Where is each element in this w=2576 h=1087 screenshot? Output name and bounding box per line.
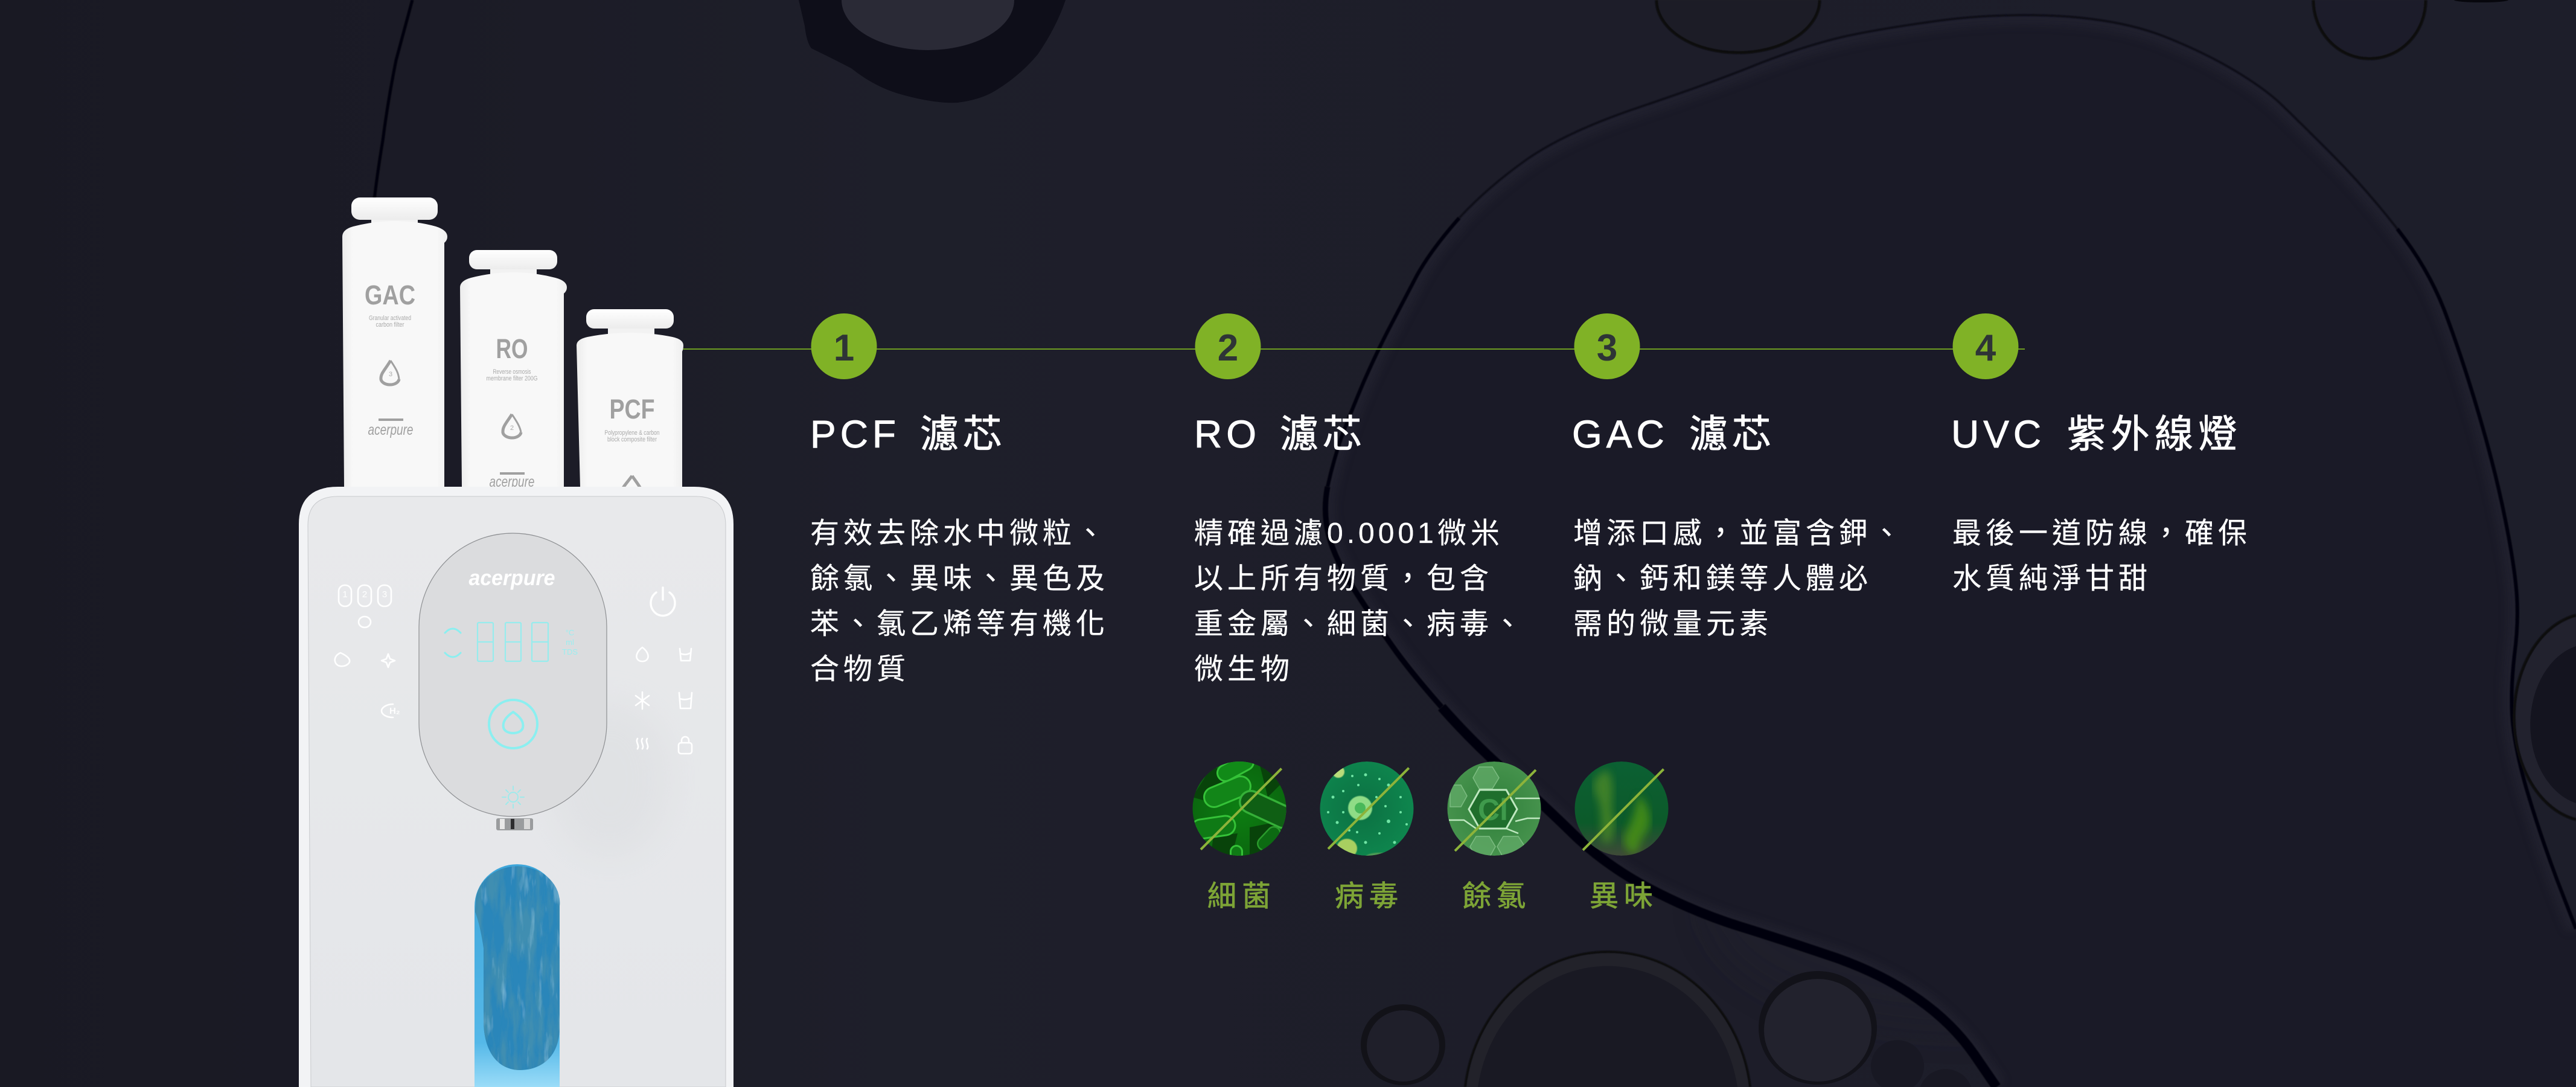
water tank window [475,864,560,1087]
label: virus: 病毒 [1335,880,1404,912]
panel: water purifier body [299,487,733,1087]
heading: 濾芯 [1689,412,1775,456]
filter: RO [460,250,567,490]
label: residual chlorine: 餘氯 [1462,880,1531,912]
icon: power button [651,588,675,616]
heading: GAC [1572,412,1669,456]
filter: GAC: acerpure [368,422,413,438]
description: 增添口感，並富含鉀、 [1573,518,1905,550]
icon: UV indicator [502,786,524,808]
connector line across steps [682,348,2025,350]
icon: bacteria crossed out [1192,761,1286,864]
heading: 紫外線燈 [2067,412,2242,456]
icon: odour crossed out [1574,762,1669,856]
description: 合物質 [810,653,910,685]
step badge: 3 [1597,327,1617,369]
icon: left panel function icons: H₂ [389,706,400,716]
readout units: °C [566,628,574,637]
label: bacteria: 細菌 [1207,880,1276,912]
readout units: TDS [562,647,578,656]
filter: RO: acerpure [489,473,535,490]
step 2: RO filter [1194,313,1526,685]
filter: GAC: GAC [365,280,415,310]
icon: left panel function icons [335,653,400,717]
filter: GAC: 3 [389,371,392,378]
panel: display oval [419,533,607,816]
filter: PCF [577,309,683,490]
description: 最後一道防線，確保 [1952,518,2251,550]
background: top-left dark bubble [799,0,1066,103]
filter: RO: membrane filter 200G [487,375,537,382]
filter: GAC [342,197,447,487]
filter: RO: RO [496,333,528,364]
readout units [562,628,578,656]
icon: residual chlorine crossed out: Cl [1478,793,1508,827]
description: 需的微量元素 [1573,608,1772,640]
step 4: UVC lamp [1951,313,2251,595]
filter: GAC: Granular activated [369,315,411,322]
step badge: 2 [1218,327,1238,369]
icon: dispense button [489,700,537,748]
step 1: PCF filter [810,313,1109,685]
background: top-left liquid streak [374,0,412,199]
icon: virus crossed out [1320,762,1414,862]
step badge [1195,313,1261,379]
step badge [1574,313,1640,379]
description: 鈉、鈣和鎂等人體必 [1573,563,1872,595]
icon: filter status badges [339,585,391,627]
logo: acerpure: acerpure [468,565,555,590]
heading: RO [1194,412,1261,456]
step badge [811,313,877,379]
icon: filter status badges: 3 [382,589,387,600]
description: 苯、氯乙烯等有機化 [810,608,1109,640]
description: 餘氯、異味、異色及 [810,563,1109,595]
icon: right panel temperature and cup icons [636,647,692,754]
filter: PCF: Polypropylene & carbon [605,429,659,437]
filter: RO: 2 [510,425,514,432]
background: right edge bubble [2514,615,2576,819]
step badge [1952,313,2019,379]
step badge: 4 [1975,327,1996,369]
heading: UVC [1951,412,2045,456]
panel: water purifier filters [342,197,683,490]
readout units: ml [566,638,574,647]
icon: filter status badges: 2 [362,589,367,600]
description: 以上所有物質，包含 [1194,563,1493,595]
icon: filter status badges: 1 [342,589,348,600]
description: 有效去除水中微粒、 [810,518,1109,550]
label: odour: 異味 [1590,880,1658,912]
description: 精確過濾0.0001微米 [1194,518,1504,550]
filter: PCF: PCF [610,394,654,425]
heading: 濾芯 [920,412,1006,456]
faucet nozzle [496,818,533,830]
background: large liquid blob [1325,15,2576,1087]
description: 水質純淨甘甜 [1952,563,2152,595]
heading: PCF [810,412,900,456]
icon: residual chlorine crossed out [1447,762,1541,858]
digital readout 888 [478,623,548,661]
step 3: GAC filter [1572,313,1905,640]
background: top bubbles [1657,0,2508,59]
background: bottom bubbles [1361,952,1971,1087]
heading: 濾芯 [1280,412,1366,456]
icon: up and down chevrons [445,629,461,657]
description: 重金屬、細菌、病毒、 [1194,608,1526,640]
filter: PCF: block composite filter [607,436,657,443]
filter: RO: Reverse osmosis [493,368,531,376]
step badge: 1 [834,327,854,369]
filter: GAC: carbon filter [376,321,404,329]
description: 微生物 [1194,653,1294,685]
